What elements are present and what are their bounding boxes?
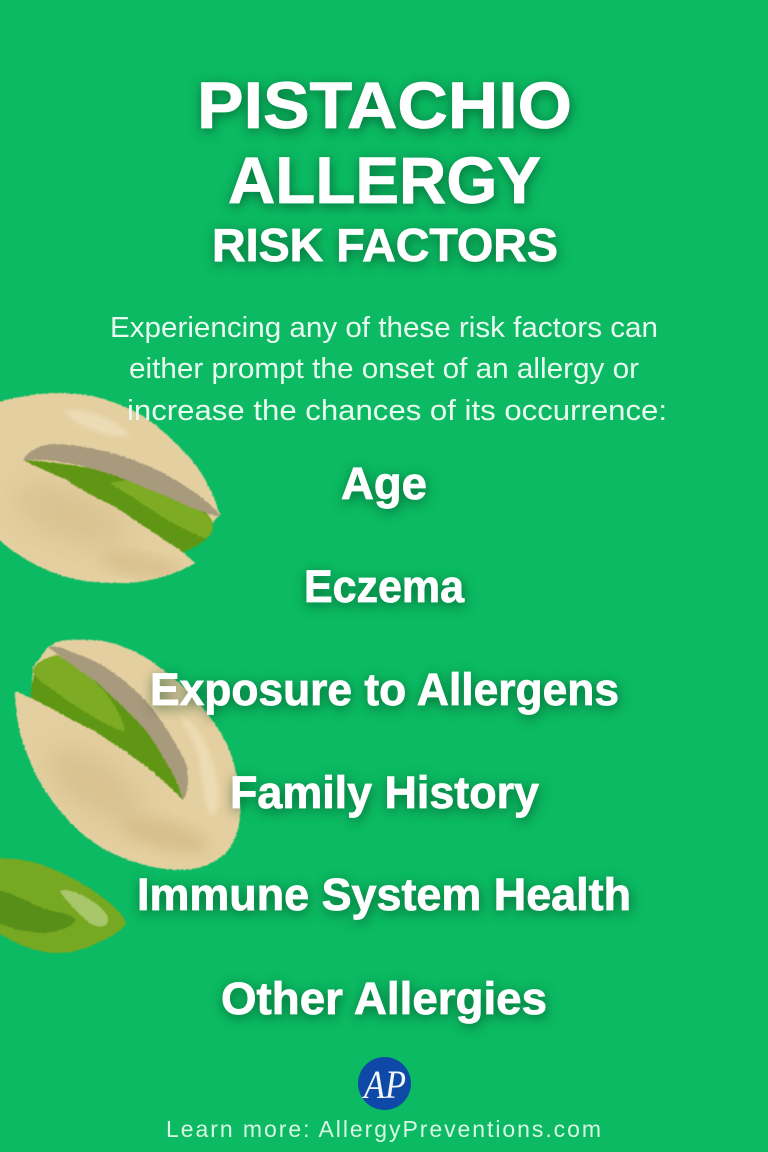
icon: pistachio kernel <box>0 858 126 953</box>
item: immune system health: Immune System Health <box>137 869 631 920</box>
icon: pistachio top <box>0 393 221 583</box>
intro paragraph: increase the chances of its occurrence: <box>127 394 667 426</box>
title line: pistachio: PISTACHIO <box>197 68 572 142</box>
item: eczema: Eczema <box>304 561 465 612</box>
intro paragraph: either prompt the onset of an allergy or <box>129 352 639 384</box>
item: family history: Family History <box>230 767 539 818</box>
item: other allergies: Other Allergies <box>221 973 547 1024</box>
logo: AP <box>361 1062 406 1107</box>
title line: allergy: ALLERGY <box>228 143 541 217</box>
risk factor list <box>137 458 631 1024</box>
intro paragraph <box>110 311 667 426</box>
item: exposure to allergens: Exposure to Allergens <box>150 664 619 715</box>
icon: pistachio middle <box>15 640 240 870</box>
title <box>197 68 572 271</box>
intro paragraph: Experiencing any of these risk factors can <box>110 311 658 343</box>
footer link: Learn more: AllergyPreventions.com <box>166 1116 601 1142</box>
subtitle: risk factors: RISK FACTORS <box>212 219 558 271</box>
item: age: Age <box>341 458 427 509</box>
